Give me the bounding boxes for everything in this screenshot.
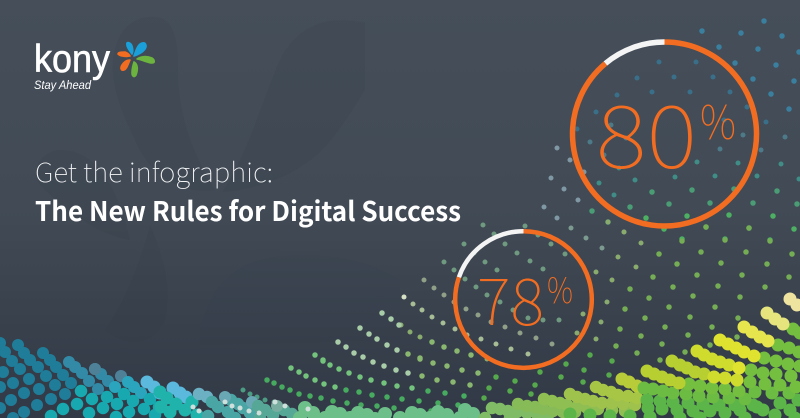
- stat: 78 percent: [455, 231, 592, 368]
- logo: kony: [34, 38, 154, 92]
- dot field: middle green dots: [243, 222, 792, 411]
- subtitle: Get the infographic:: [35, 151, 273, 190]
- ring: 78 percent: [455, 231, 592, 368]
- title: The New Rules for Digital Success: [35, 190, 461, 229]
- ring: 80 percent: [573, 42, 757, 226]
- percent sign: 80: %: [700, 84, 736, 153]
- logo tagline: Stay Ahead: [34, 80, 92, 92]
- dot field: upper blue dots: [544, 21, 799, 248]
- dot wave: lower-right green and yellow: [485, 299, 800, 418]
- value: 80: 80: [596, 68, 697, 194]
- stat: 80 percent: [573, 42, 757, 226]
- background petal shapes: [36, 17, 400, 345]
- percent sign: 78: %: [547, 263, 573, 314]
- logo star icon: [118, 43, 154, 76]
- dot wave: lower-left teal: [0, 343, 473, 418]
- logo wordmark: kony: [34, 38, 110, 81]
- value: 78: 78: [477, 250, 544, 344]
